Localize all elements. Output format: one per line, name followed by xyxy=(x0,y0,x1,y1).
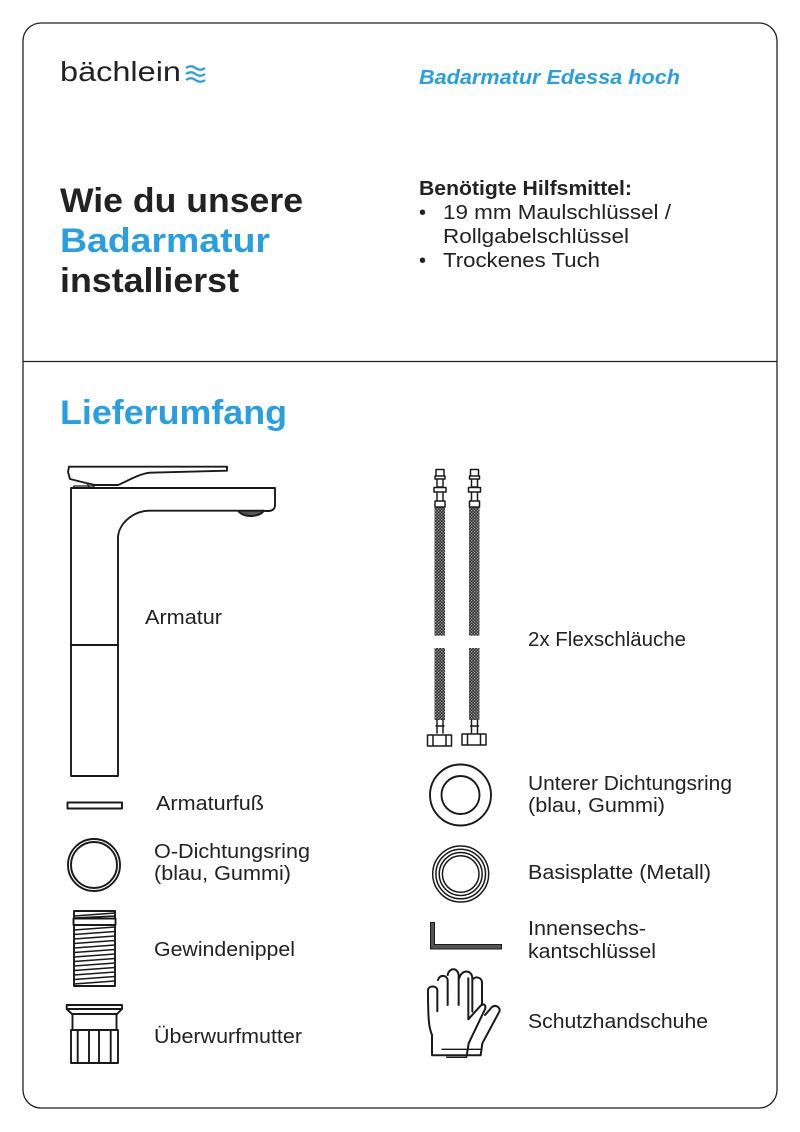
product name: Badarmatur Edessa hoch xyxy=(419,67,680,89)
label: Innensechskantschluessel xyxy=(528,918,656,963)
hose 2 xyxy=(462,470,486,745)
label: Schutzhandschuhe: Schutzhandschuhe xyxy=(528,1011,708,1033)
label: O-Dichtungsring: O-Dichtungsring xyxy=(154,841,310,863)
title: Wie du unsere xyxy=(60,182,303,220)
required tools: • xyxy=(419,202,426,224)
required tools: Rollgabelschlüssel xyxy=(443,226,629,248)
section heading: Lieferumfang: Lieferumfang xyxy=(60,394,287,432)
required tools: • xyxy=(419,250,426,272)
label: O-Dichtungsring: (blau, Gummi) xyxy=(154,863,291,885)
label: Ueberwurfmutter: Überwurfmutter xyxy=(154,1026,302,1048)
icon: faucet xyxy=(68,467,275,776)
label: Basisplatte: Basisplatte (Metall) xyxy=(528,862,711,884)
icon: union nut xyxy=(67,1005,122,1063)
icon: gloves xyxy=(428,969,500,1057)
title xyxy=(60,182,303,300)
icon: flex hoses xyxy=(428,470,486,746)
icon: threaded nipple xyxy=(74,911,116,986)
icon: Armaturfuss xyxy=(68,802,122,808)
logo: bächlein: bächlein xyxy=(60,56,181,87)
required tools: Benötigte Hilfsmittel: xyxy=(419,178,632,200)
icon: hex key xyxy=(430,922,502,949)
label: Innensechskantschluessel: Innensechs- xyxy=(528,918,646,940)
label: Armatur: Armatur xyxy=(145,607,222,629)
hose 1 xyxy=(428,470,452,746)
required tools: Trockenes Tuch xyxy=(443,250,600,272)
label: Unterer Dichtungsring: (blau, Gummi) xyxy=(528,795,665,817)
label: Unterer Dichtungsring xyxy=(528,773,732,817)
label: Armaturfuss: Armaturfuß xyxy=(156,793,264,815)
label: Innensechskantschluessel: kantschlüssel xyxy=(528,941,656,963)
title: installierst xyxy=(60,262,239,300)
icon: O-ring xyxy=(68,839,120,891)
label: Unterer Dichtungsring: Unterer Dichtungsring xyxy=(528,773,732,795)
required tools: 19 mm Maulschlüssel / xyxy=(443,202,671,224)
label: Gewindenippel: Gewindenippel xyxy=(154,939,295,961)
required tools xyxy=(419,178,671,272)
label: O-Dichtungsring xyxy=(154,841,310,885)
title: Badarmatur xyxy=(60,222,270,260)
icon: lower sealing ring xyxy=(430,764,491,826)
label: Flexschlaeuche: 2x Flexschläuche xyxy=(528,629,686,651)
icon: base plate xyxy=(433,846,489,902)
